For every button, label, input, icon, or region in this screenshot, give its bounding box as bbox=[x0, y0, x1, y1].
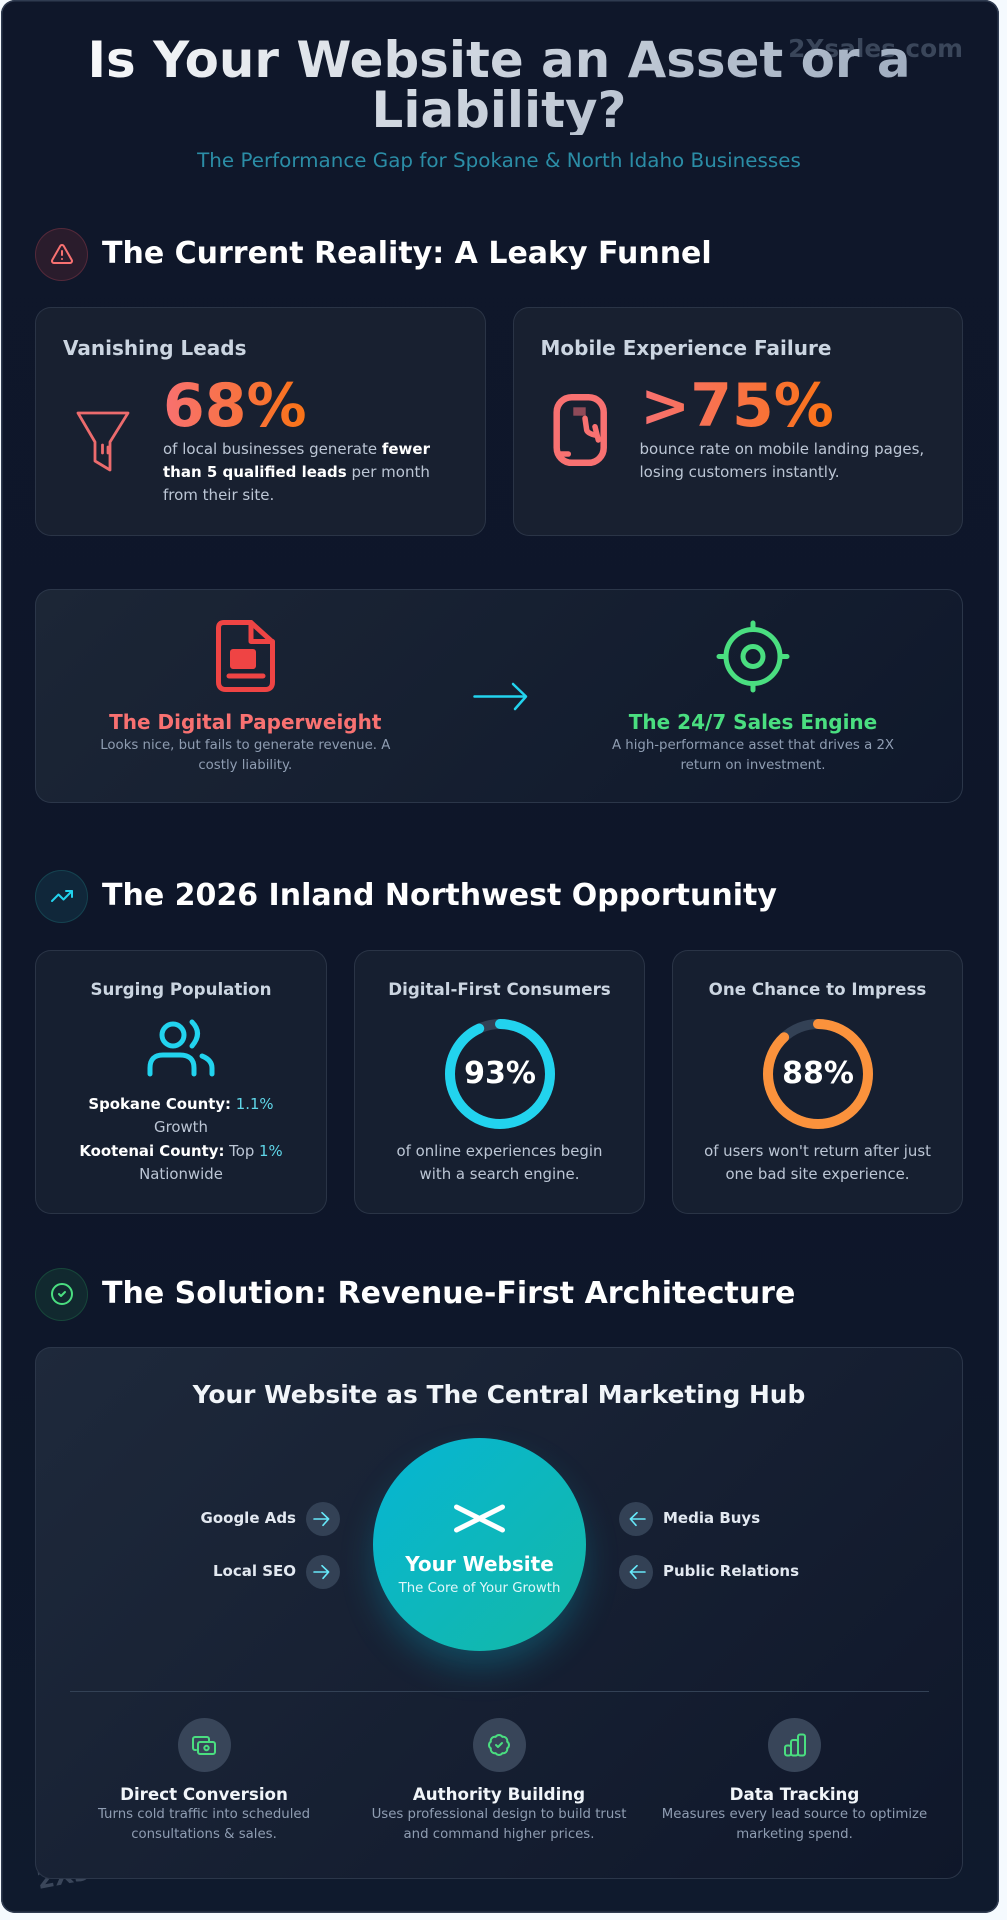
population stats: Kootenai County: Top 1% bbox=[79, 1142, 283, 1160]
donut chart: 88%: 88% bbox=[782, 1056, 853, 1091]
icon: badge check bbox=[472, 1718, 526, 1772]
item description: Looks nice, but fails to generate revenue. A bbox=[100, 738, 390, 753]
feature title: Data Tracking bbox=[730, 1784, 859, 1804]
icon: people bbox=[148, 1020, 214, 1076]
input: local seo: Local SEO bbox=[213, 1562, 296, 1580]
heading text: The Current Reality: A Leaky Funnel bbox=[102, 236, 712, 271]
feature description: Uses professional design to build trust bbox=[372, 1807, 626, 1822]
item title: The 24/7 Sales Engine bbox=[629, 710, 877, 734]
icon: trending up bbox=[35, 870, 88, 923]
feature description: Measures every lead source to optimize bbox=[662, 1807, 927, 1822]
description bbox=[397, 1142, 602, 1183]
section heading: current reality bbox=[35, 228, 712, 281]
stat description bbox=[163, 440, 430, 504]
description bbox=[704, 1142, 931, 1183]
input: media buys: Media Buys bbox=[663, 1509, 760, 1527]
comparison item: sales engine bbox=[612, 620, 894, 773]
icon: phone bbox=[553, 394, 607, 466]
panel: central marketing hub bbox=[35, 1347, 963, 1879]
panel: digital-first consumers bbox=[354, 950, 645, 1214]
population stats: Spokane County: 1.1% bbox=[88, 1095, 274, 1113]
description: one bad site experience. bbox=[725, 1165, 910, 1183]
icon: warning triangle bbox=[35, 228, 88, 281]
description: with a search engine. bbox=[420, 1165, 579, 1183]
stat description: of local businesses generate fewer bbox=[163, 440, 430, 458]
title: Liability? bbox=[372, 81, 626, 139]
stat description: than 5 qualified leads per month bbox=[163, 463, 430, 481]
donut chart: 93% bbox=[445, 1019, 555, 1129]
stat description bbox=[640, 440, 924, 481]
panel: mobile experience failure bbox=[512, 307, 963, 536]
input: google ads: Google Ads bbox=[201, 1509, 296, 1527]
icon: funnel bbox=[76, 412, 130, 472]
panel: one chance to impress bbox=[672, 950, 963, 1214]
feature description: Turns cold traffic into scheduled bbox=[98, 1807, 310, 1822]
feature description bbox=[372, 1807, 626, 1842]
input: local seo bbox=[213, 1555, 340, 1589]
population stats bbox=[79, 1095, 283, 1183]
description: of users won't return after just bbox=[704, 1142, 931, 1160]
section heading: opportunity bbox=[35, 870, 777, 923]
population stats: Growth bbox=[154, 1118, 208, 1136]
card title: Mobile Experience Failure bbox=[540, 336, 831, 360]
card title: One Chance to Impress bbox=[709, 979, 926, 999]
stat description: bounce rate on mobile landing pages, bbox=[640, 440, 924, 458]
input: google ads bbox=[201, 1502, 340, 1536]
feature description bbox=[98, 1807, 310, 1842]
panel: vanishing leads bbox=[35, 307, 486, 536]
panel: paperweight versus sales engine comparison bbox=[35, 589, 963, 803]
stat: 68%: 68% bbox=[163, 371, 307, 441]
icon: check circle bbox=[35, 1268, 88, 1321]
item title: The Digital Paperweight bbox=[109, 710, 381, 734]
icon: document bbox=[216, 620, 275, 692]
card title: Digital-First Consumers bbox=[388, 979, 611, 999]
feature: authority building bbox=[372, 1718, 626, 1842]
input: public relations bbox=[619, 1555, 799, 1589]
arrow bbox=[473, 682, 528, 710]
feature title: Authority Building bbox=[413, 1784, 585, 1804]
item description bbox=[100, 738, 390, 773]
stat: >75%: >75% bbox=[640, 371, 834, 441]
feature description: and command higher prices. bbox=[404, 1827, 594, 1842]
hub sublabel: The Core of Your Growth bbox=[399, 1580, 560, 1596]
item description: costly liability. bbox=[198, 758, 292, 773]
feature: data tracking bbox=[662, 1718, 927, 1842]
hub label: Your Website bbox=[405, 1552, 554, 1576]
input: public relations: Public Relations bbox=[663, 1562, 799, 1580]
feature description bbox=[662, 1807, 927, 1842]
icon: bar chart bbox=[768, 1718, 821, 1772]
heading text: The Solution: Revenue-First Architecture bbox=[102, 1276, 795, 1311]
section heading: solution bbox=[35, 1268, 795, 1321]
item description: return on investment. bbox=[680, 758, 826, 773]
description: of online experiences begin bbox=[397, 1142, 602, 1160]
panel: surging population bbox=[35, 950, 327, 1214]
card title: Vanishing Leads bbox=[63, 336, 247, 360]
watermark: bottom left: 2Xsales.com bbox=[34, 1833, 212, 1895]
comparison item: digital paperweight bbox=[100, 620, 390, 773]
icon: banknotes bbox=[178, 1718, 230, 1772]
title: Is Your Website an Asset or a bbox=[87, 31, 911, 89]
donut chart: 88% bbox=[763, 1019, 873, 1129]
central hub circle bbox=[373, 1438, 586, 1651]
stat description: from their site. bbox=[163, 486, 274, 504]
watermark: top right: 2Xsales.com bbox=[788, 34, 963, 63]
hub title: Your Website as The Central Marketing Hub bbox=[193, 1380, 805, 1409]
title bbox=[35, 35, 963, 135]
input: media buys bbox=[619, 1502, 760, 1536]
donut chart: 93%: 93% bbox=[464, 1056, 535, 1091]
card title: Surging Population bbox=[90, 979, 271, 999]
heading text: The 2026 Inland Northwest Opportunity bbox=[102, 878, 777, 913]
feature: direct conversion bbox=[98, 1718, 310, 1842]
item description bbox=[612, 738, 894, 773]
feature description: marketing spend. bbox=[736, 1827, 853, 1842]
icon: crossed lines bbox=[454, 1504, 505, 1532]
item description: A high-performance asset that drives a 2X bbox=[612, 738, 894, 753]
feature title: Direct Conversion bbox=[120, 1784, 288, 1804]
subtitle: The Performance Gap for Spokane & North Idaho Businesses bbox=[197, 149, 801, 172]
population stats: Nationwide bbox=[139, 1165, 223, 1183]
stat description: losing customers instantly. bbox=[640, 463, 839, 481]
icon: target bbox=[716, 620, 790, 692]
feature description: consultations & sales. bbox=[131, 1827, 277, 1842]
